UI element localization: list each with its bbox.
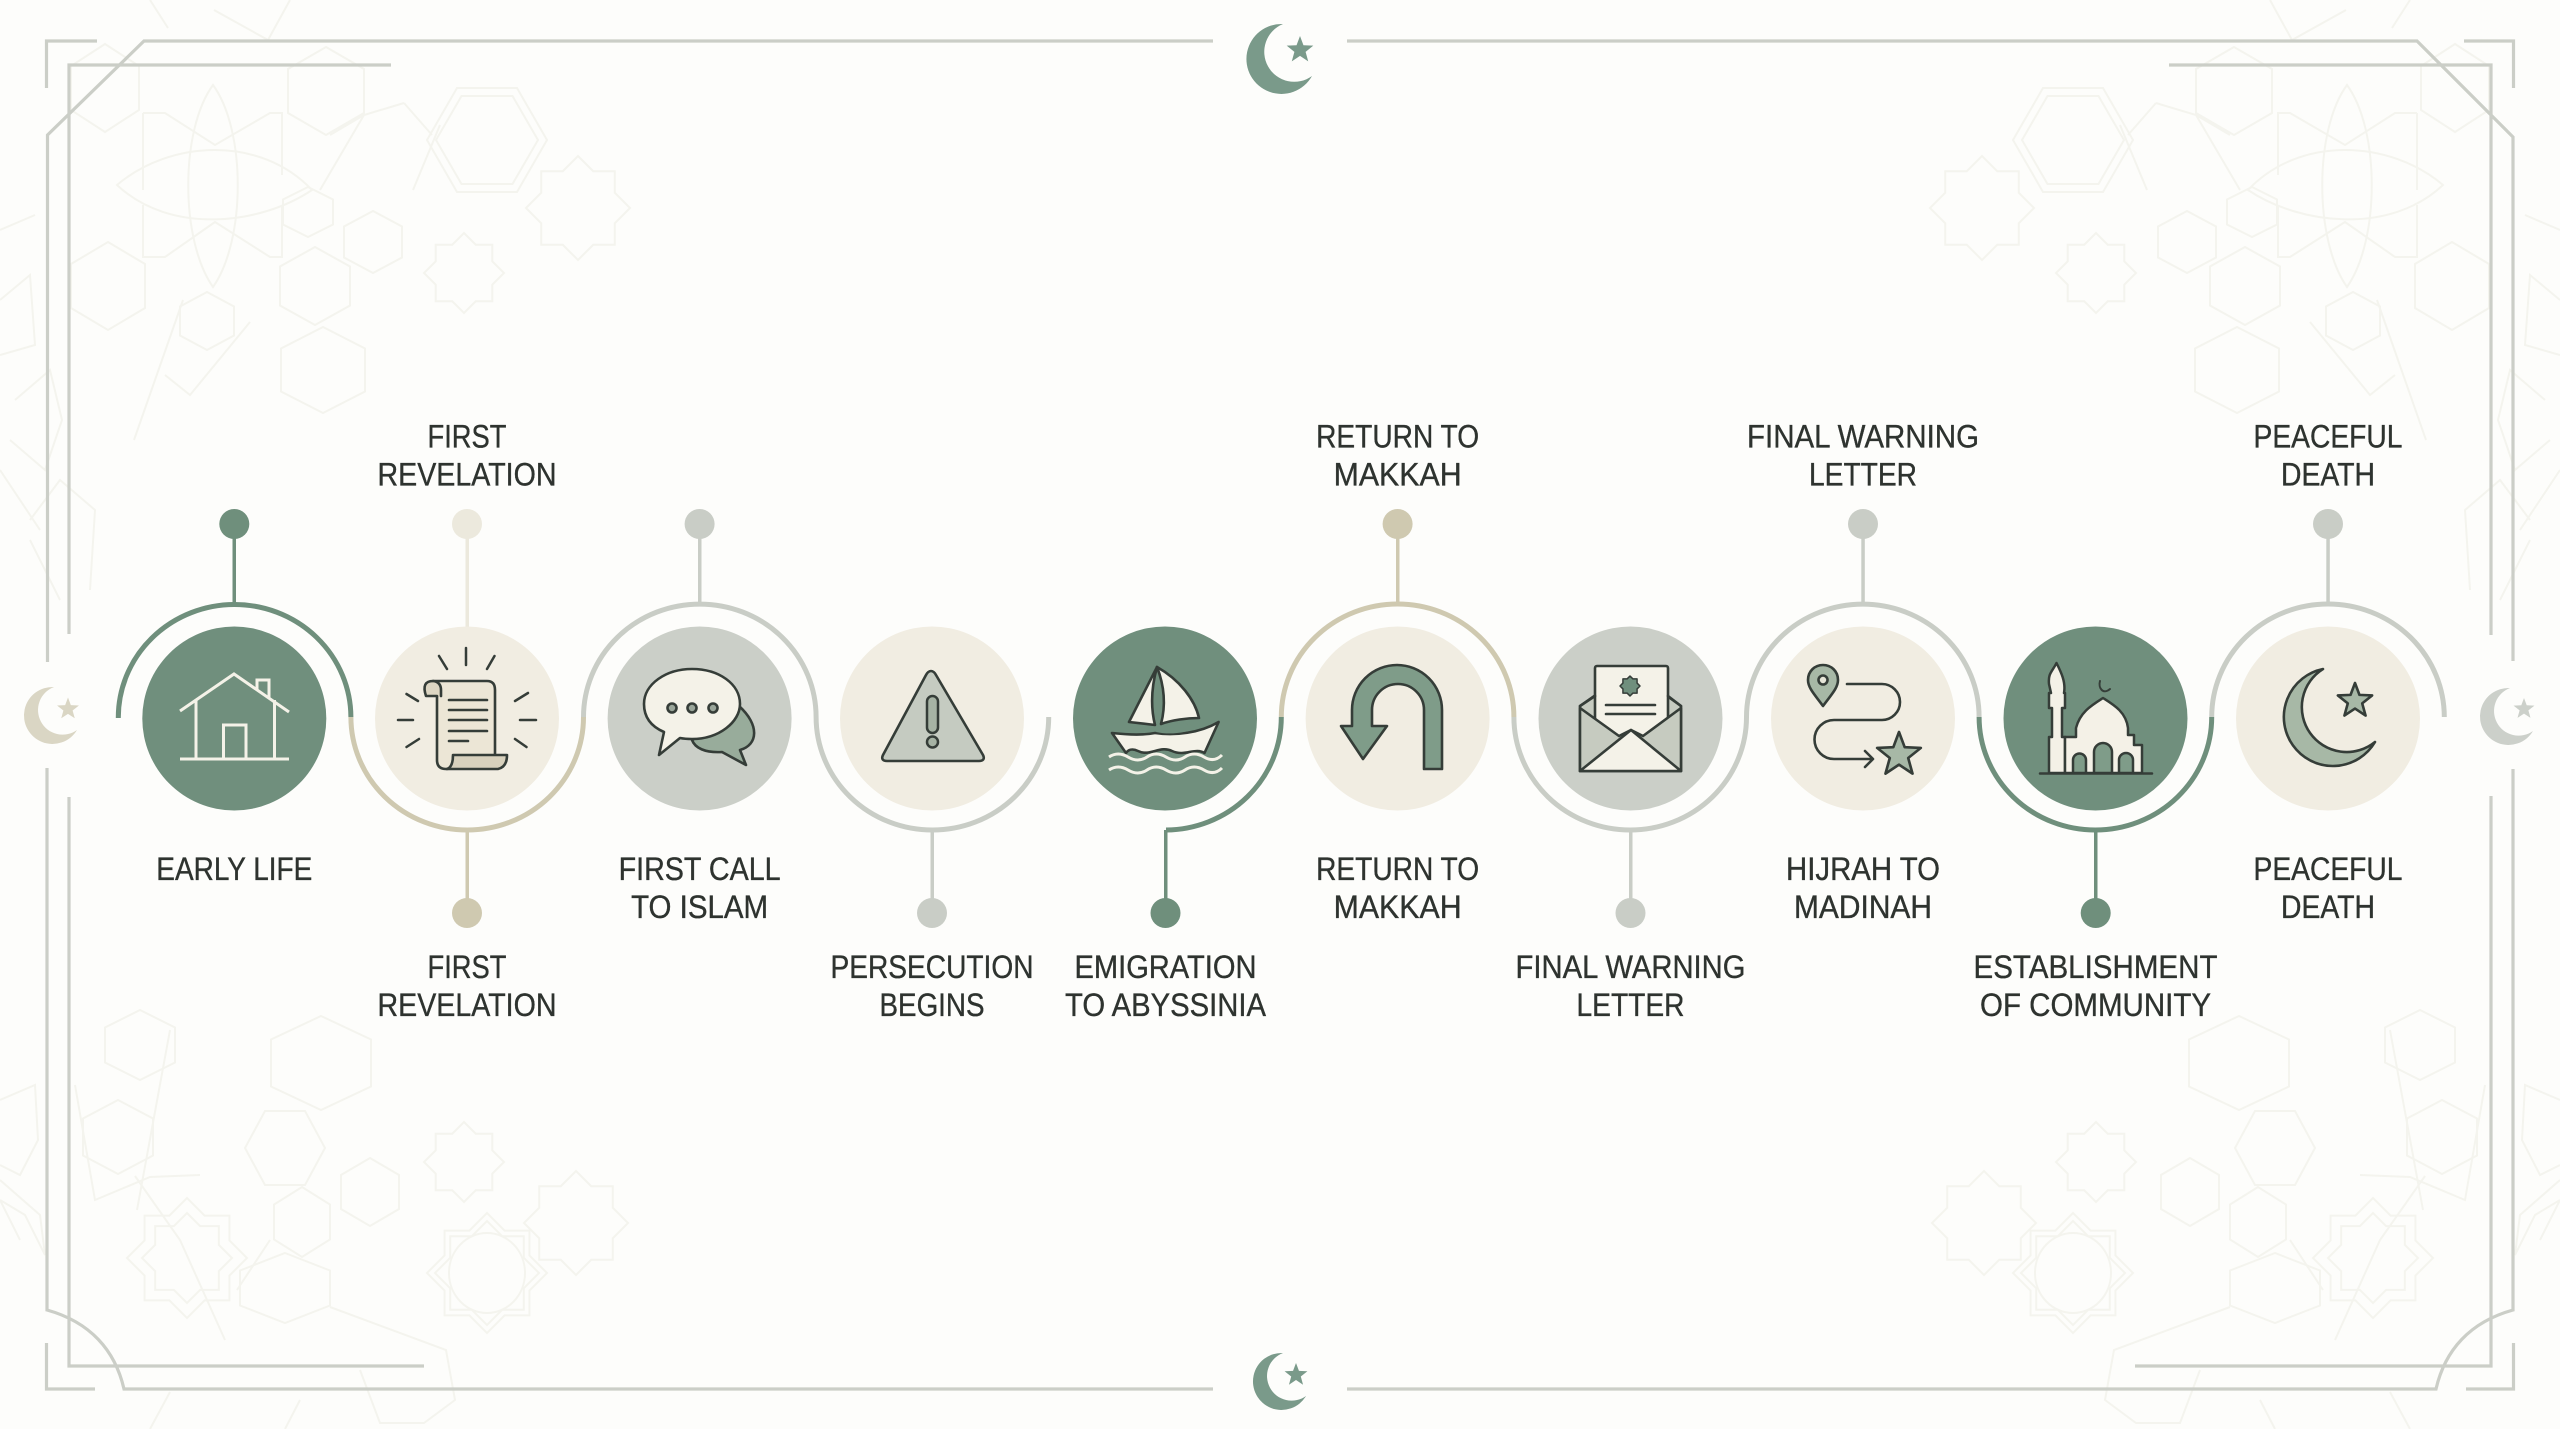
step 5: emigration to Abyssinia: TO ABYSSINIA [1065,987,1267,1023]
connector arc [1166,717,1281,830]
step 6: return to Makkah: MAKKAH [1334,889,1462,925]
label: EMIGRATION [1074,949,1256,985]
connector arc [2212,604,2444,717]
step 6: return to Makkah [1281,418,1514,925]
crescent ornament: right [2480,688,2534,745]
icon: scroll [398,648,536,769]
circle [1306,626,1490,810]
step 4: persecution begins [816,626,1049,1023]
label: PERSECUTION [830,949,1034,985]
step 2: first revelation: REVELATION [378,456,556,492]
stem and dot [1848,509,1878,604]
step 9: establishment of community [1974,626,2218,1023]
label: EARLY LIFE [156,851,312,887]
icon: mosque [2040,663,2152,774]
circle [2004,626,2188,810]
step 2: first revelation: FIRST [428,949,506,985]
circle [608,626,792,810]
step 3: first call to Islam: TO ISLAM [631,889,768,925]
circle [1771,626,1955,810]
crescent ornament: bottom [1253,1353,1307,1410]
step 7: final warning letter: LETTER [1576,987,1684,1023]
circle [840,626,1024,810]
step 4: persecution begins: BEGINS [880,987,984,1023]
step 10: peaceful death: PEACEFUL [2254,851,2402,887]
crescent ornament: top [1246,24,1313,94]
stem and dot [917,830,947,928]
circle [375,626,559,810]
bottom stem and dot [452,830,482,928]
stem and dot [2081,830,2111,928]
step 10: peaceful death: DEATH [2281,456,2375,492]
connector arc [118,604,351,718]
step 6: return to Makkah: RETURN TO [1316,851,1479,887]
connector arc [816,717,1049,830]
connector arc [1281,604,1514,717]
icon: speech bubbles [644,669,754,765]
step 5: emigration to Abyssinia [1065,626,1281,1023]
stem and dot [1150,830,1180,928]
step 8: hijrah to Madinah: MADINAH [1794,889,1932,925]
labels: PEACEFUL [2254,418,2402,454]
step 8: hijrah to Madinah [1746,418,1979,925]
connector arc [1746,604,1979,717]
connector arc [584,604,816,717]
label: FIRST CALL [619,851,781,887]
stem and dot [685,509,715,604]
top stem and dot [452,509,482,628]
step 8: hijrah to Madinah: HIJRAH TO [1786,851,1940,887]
step 7: final warning letter [1514,626,1746,1023]
circle [2236,626,2420,810]
crescent ornament: left [24,687,79,744]
step 9: establishment of community: OF COMMUNITY [1980,987,2211,1023]
step 10: peaceful death [2212,418,2444,925]
labels: RETURN TO [1316,418,1479,454]
step 6: return to Makkah: MAKKAH [1334,456,1462,492]
step 2: first revelation: REVELATION [378,987,556,1023]
label: FINAL WARNING [1516,949,1746,985]
step 10: peaceful death: DEATH [2281,889,2375,925]
stem and dot [219,509,249,604]
icon: house [180,674,289,759]
label: ESTABLISHMENT [1974,949,2218,985]
step 8: hijrah to Madinah: LETTER [1809,456,1917,492]
icon: envelope [1580,666,1681,771]
stem and dot [2313,509,2343,604]
icon: crescent and star [2284,669,2375,766]
step 3: first call to Islam [584,509,816,925]
icon: warning triangle [882,671,984,761]
circle [1538,626,1722,810]
icon: sailboat [1109,667,1222,773]
labels: FINAL WARNING [1747,418,1979,454]
connector arc [1514,717,1746,830]
connector arc [1979,717,2212,830]
labels: FIRST [428,418,506,454]
icon: route with pin and star [1808,665,1921,774]
connector arc [351,717,584,830]
circle [142,626,326,810]
icon: u-turn arrow [1341,665,1442,769]
step 1: early life [118,509,351,887]
step 2: first revelation [351,418,584,1023]
stem and dot [1383,509,1413,604]
stem and dot [1616,830,1646,928]
circle [1073,626,1257,810]
